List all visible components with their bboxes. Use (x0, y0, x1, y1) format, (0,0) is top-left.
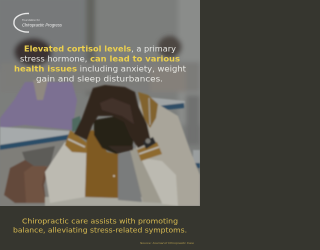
desk front (45, 197, 170, 206)
head (94, 114, 134, 154)
line 4: gain and sleep disturbances. (36, 74, 163, 84)
logo name: Chiropractic Progress (22, 22, 63, 28)
woman left: lavender top (0, 82, 77, 130)
caption line 1: Chiropractic care assists with promoting (22, 218, 178, 226)
line 1: Elevated cortisol levels , a primary (24, 44, 177, 54)
photo: stressed student at desk (0, 0, 208, 206)
desk left (0, 127, 72, 145)
floor and skirt (0, 139, 66, 151)
panel: bottom caption band (0, 206, 200, 250)
jacket: right body (136, 95, 200, 206)
infographic canvas (0, 0, 200, 245)
source note: Source: Journal of Chiropractic Care (140, 241, 194, 245)
woman left: head (14, 38, 52, 66)
hands (74, 85, 151, 148)
logo: Chiropractic Progress (14, 13, 63, 32)
scarf lining (85, 130, 122, 198)
line 2: stress hormone, can lead to various (20, 54, 181, 64)
logo small line: Foundation for (22, 18, 41, 22)
caption line 2: balance, alleviating stress-related symptoms. (13, 226, 187, 234)
line 3: health issues including anxiety, weight (14, 64, 186, 74)
icon: logo arc (14, 13, 29, 32)
lapel right (138, 92, 158, 128)
caption text (13, 218, 187, 234)
desk right (150, 97, 186, 106)
heading: main message (14, 44, 186, 84)
watch (143, 137, 156, 149)
sleeve cuffs (65, 130, 87, 153)
jacket: left sleeve (45, 142, 87, 203)
grey shirt (118, 152, 142, 202)
woman right: head (158, 36, 182, 58)
leg (4, 160, 50, 203)
